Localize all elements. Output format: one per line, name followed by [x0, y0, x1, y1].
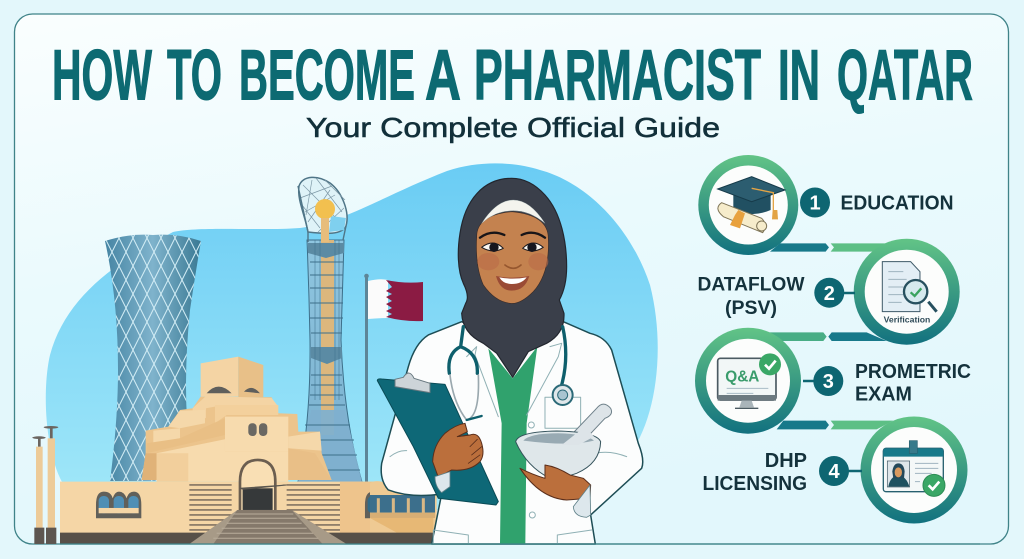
connector 3 to 4	[777, 421, 893, 429]
white coat	[381, 322, 643, 544]
right cuff	[573, 485, 591, 517]
connector 1 to 2	[770, 243, 893, 252]
left cuff	[435, 472, 450, 493]
right museum wing	[370, 481, 437, 544]
coat lapels	[390, 343, 627, 543]
face	[476, 212, 548, 304]
label: PROMETRIC	[855, 361, 971, 383]
mortar	[516, 431, 601, 478]
step 2 dataflow: (PSV)	[725, 297, 777, 319]
stethoscope	[449, 327, 566, 385]
step 1 education	[698, 155, 954, 255]
number badge	[840, 292, 855, 294]
icon: verification document	[882, 262, 937, 325]
tornado tower	[105, 234, 201, 481]
panel bottom line	[60, 543, 980, 545]
lamp posts	[32, 426, 58, 544]
step 4 dhp licensing: LICENSING	[702, 473, 807, 495]
number badge	[803, 380, 815, 382]
title	[52, 36, 973, 116]
ring	[695, 328, 801, 434]
step 3 prometric exam: 3	[823, 371, 834, 393]
museum of islamic art	[60, 357, 397, 544]
connector 2 to 3	[763, 332, 887, 341]
title: TO	[167, 36, 222, 116]
pestle	[562, 404, 612, 447]
eyes	[482, 243, 503, 251]
title: BECOME	[239, 36, 415, 116]
left hand	[433, 423, 483, 477]
icon: id card	[883, 441, 945, 496]
number badge	[845, 470, 862, 472]
scrub top	[488, 347, 537, 544]
title: IN	[778, 36, 820, 116]
cheeks	[477, 253, 499, 270]
left fingers	[457, 435, 482, 463]
step 3 prometric exam	[695, 328, 971, 434]
background blob	[46, 163, 658, 510]
title: HOW	[52, 36, 152, 116]
label: DHP	[765, 450, 807, 472]
step 4 dhp licensing: 4	[828, 461, 840, 483]
ring	[854, 239, 960, 345]
icon: exam monitor: Q&A	[725, 369, 759, 386]
ring	[860, 416, 968, 524]
title: A	[425, 36, 461, 116]
clipboard	[377, 379, 498, 505]
label: EDUCATION	[840, 192, 954, 214]
mouth	[496, 276, 529, 291]
right hand	[520, 465, 591, 500]
ring	[698, 155, 798, 255]
subtitle: Your Complete Official Guide	[306, 112, 720, 143]
icon: graduation cap and diploma	[718, 177, 785, 233]
step 1 education: 1	[809, 192, 821, 214]
step 4 dhp licensing	[702, 416, 968, 524]
step 3 prometric exam: EXAM	[855, 384, 912, 406]
brows	[480, 233, 545, 238]
icon: verification document: Verification	[884, 315, 930, 325]
icon: exam monitor	[718, 353, 781, 408]
pharmacist	[377, 178, 643, 544]
nose	[505, 265, 521, 268]
number badge	[800, 188, 830, 218]
title: PHARMACIST	[474, 36, 761, 116]
qatar flag	[364, 274, 423, 482]
coat buttons	[528, 422, 534, 428]
aspire tower	[298, 177, 362, 482]
head band	[482, 200, 545, 223]
step 2 dataflow: 2	[824, 283, 835, 305]
step 2 dataflow	[698, 239, 960, 345]
hijab	[458, 178, 567, 377]
label: DATAFLOW	[698, 274, 805, 296]
